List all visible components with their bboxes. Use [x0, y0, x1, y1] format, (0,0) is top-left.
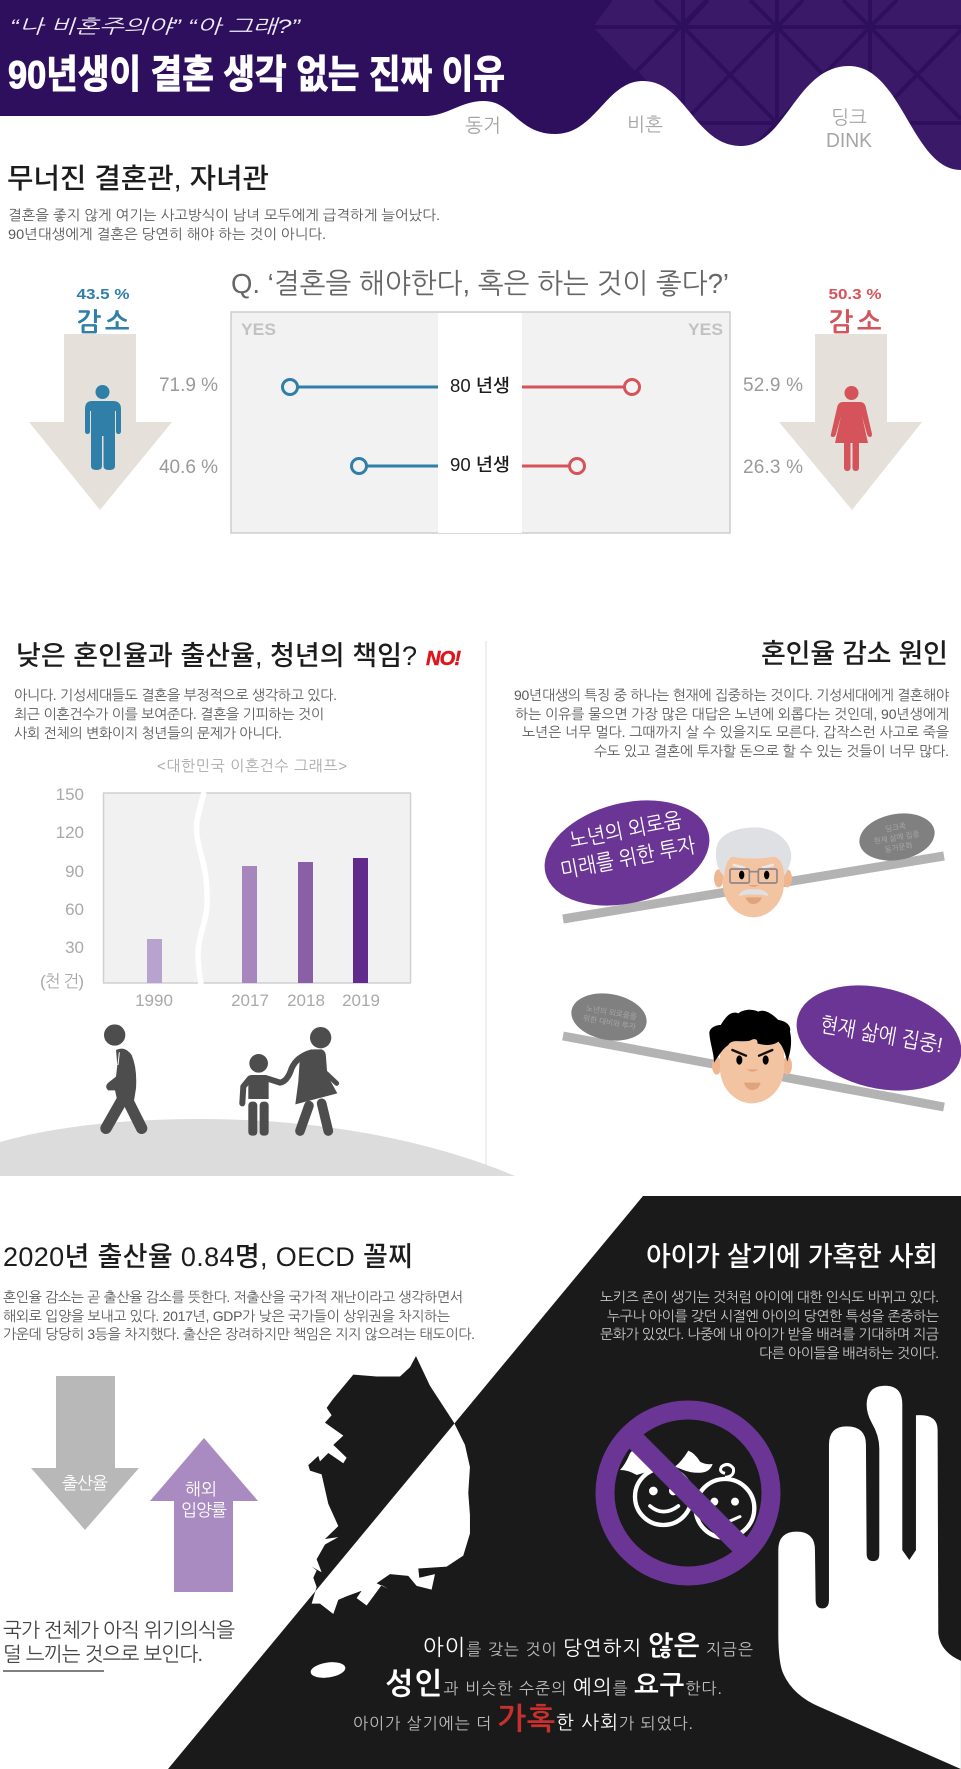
- small bubble: [568, 988, 650, 1046]
- bar chart: divorces: 1990: [135, 991, 173, 1010]
- statement: 국가 전체가 아직 위기의식을: [3, 1620, 235, 1642]
- dumbbell chart: marriage attitude: [231, 312, 730, 533]
- handwritten quote: “나 비혼주의야” “아 그래?”: [10, 17, 302, 38]
- heading: youth responsibility: 낮은 혼인율과 출산율, 청년의 책임?: [16, 641, 417, 671]
- arrow: birth rate down: [31, 1376, 139, 1530]
- big bubble: 노년의 외로움: [568, 809, 684, 853]
- female decrease stat: 50.3 %: [828, 286, 882, 303]
- closing message: 성인과 비슷한 수준의 예의를 요구한다.: [385, 1668, 722, 1701]
- icon: young man face: [709, 1010, 792, 1103]
- small bubble: [856, 808, 938, 866]
- heading: birth rate: 2020년 출산율 0.84명, OECD 꼴찌: [3, 1242, 413, 1272]
- bar chart: divorces: 2017: [231, 991, 269, 1010]
- arrow with woman icon: [779, 334, 922, 510]
- wave labels: DINK: [826, 130, 873, 152]
- wave labels: 비혼: [627, 115, 663, 136]
- section text: 아니다. 기성세대들도 결혼을 부정적으로 생각하고 있다.: [14, 687, 337, 703]
- seesaw: younger generation: [563, 969, 961, 1107]
- icon: older man face: [714, 827, 792, 917]
- bar chart: divorces: 2018: [287, 991, 325, 1010]
- arrow: birth rate down: 출산율: [62, 1474, 108, 1493]
- children faces: [620, 1451, 754, 1538]
- section text: [8, 207, 440, 242]
- male decrease stat: 감 소: [76, 307, 130, 337]
- small bubble: 위한 대비와 투자: [582, 1013, 637, 1032]
- bar chart: divorces: 150: [56, 785, 84, 804]
- arrow: overseas adoption up: 입양률: [181, 1501, 227, 1520]
- section text: 가운데 당당히 3등을 차지했다. 출산은 장려하지만 책임은 지지 않으려는 태도이다.: [3, 1326, 475, 1342]
- icon: stop hand: [778, 1386, 961, 1769]
- header banner: [0, 0, 961, 180]
- bar chart: divorces: 60: [65, 900, 84, 919]
- male decrease stat: 43.5 %: [76, 286, 130, 303]
- dumbbell chart: marriage attitude: 90 년생: [450, 455, 510, 475]
- section text: 사회 전체의 변화이지 청년들의 문제가 아니다.: [14, 725, 282, 741]
- map of Korea, white part: [312, 1424, 470, 1614]
- bar chart: divorces: (천 건): [40, 972, 84, 991]
- section text: 90년대생에게 결혼은 당연히 해야 하는 것이 아니다.: [8, 226, 326, 242]
- divider: [485, 641, 487, 1176]
- dark panel: [168, 1196, 961, 1769]
- percent labels: [159, 375, 803, 478]
- ground hill: [0, 1119, 515, 1176]
- bar chart: divorces: 2019: [342, 991, 380, 1010]
- NO! callout: NO!: [426, 648, 461, 670]
- male decrease stat: [76, 286, 130, 337]
- small bubble: 현재 삶에 집중: [873, 829, 920, 846]
- section text: 하는 이유를 물으면 가장 많은 대답은 노년에 외롭다는 것인데, 90년생에게: [515, 706, 949, 722]
- female decrease stat: 감 소: [828, 307, 882, 337]
- section text: 결혼을 좋지 않게 여기는 사고방식이 남녀 모두에게 급격하게 늘어났다.: [8, 207, 440, 223]
- section text: 문화가 있었다. 나중에 내 아이가 받을 배려를 기대하며 지금: [600, 1326, 939, 1342]
- seesaw: older generation: [533, 784, 944, 922]
- section text: 최근 이혼건수가 이를 보여준다. 결혼을 기피하는 것이: [14, 706, 324, 722]
- section text: 혼인율 감소는 곧 출산율 감소를 뜻한다. 저출산을 국가적 재난이라고 생각하면서: [3, 1289, 463, 1305]
- percent labels: 40.6 %: [159, 457, 218, 478]
- arrow with man icon: [29, 334, 172, 510]
- bar chart: divorces: 30: [65, 938, 84, 957]
- wave labels: [465, 108, 873, 152]
- statement: 덜 느끼는 것으로 보인다.: [3, 1644, 203, 1666]
- closing message: 아이를 갖는 것이 당연하지 않은 지금은: [423, 1631, 753, 1661]
- chart title: <대한민국 이혼건수 그래프>: [157, 758, 347, 775]
- percent labels: 71.9 %: [159, 375, 218, 396]
- section text: [14, 687, 337, 741]
- statement: [3, 1620, 235, 1671]
- big bubble: 현재 삶에 집중!: [818, 1013, 944, 1057]
- section text: 수도 있고 결혼에 투자할 돈으로 할 수 있는 것들이 너무 많다.: [594, 743, 949, 759]
- bar chart: divorces: 90: [65, 862, 84, 881]
- percent labels: 52.9 %: [743, 375, 803, 396]
- title: 90년생이 결혼 생각 없는 진짜 이유: [8, 54, 505, 97]
- section text: [600, 1289, 939, 1361]
- big bubble: 미래를 위한 투자: [559, 834, 698, 883]
- heading: marriage decline cause: 혼인율 감소 원인: [761, 639, 948, 669]
- section text: 다른 아이들을 배려하는 것이다.: [759, 1345, 939, 1361]
- heading: harsh society: 아이가 살기에 가혹한 사회: [646, 1242, 938, 1272]
- section text: 90년대생의 특징 중 하나는 현재에 집중하는 것이다. 기성세대에게 결혼해야: [514, 687, 950, 703]
- arrow: overseas adoption up: [150, 1438, 258, 1592]
- wave labels: 딩크: [831, 108, 867, 129]
- section text: 해외로 입양을 보내고 있다. 2017년, GDP가 낮은 국가들이 상위권을 차지하는: [3, 1308, 450, 1324]
- map of Korea, black part: [308, 1356, 470, 1614]
- bar chart: divorces: [40, 785, 410, 1010]
- section text: 노키즈 존이 생기는 것처럼 아이에 대한 인식도 바뀌고 있다.: [600, 1289, 939, 1305]
- closing message: 아이가 살기에는 더 가혹한 사회가 되었다.: [353, 1703, 693, 1736]
- icon: person walking alone: [104, 1024, 142, 1128]
- dumbbell chart: marriage attitude: YES: [241, 320, 276, 339]
- big bubble: [533, 784, 721, 922]
- small bubble: 노년의 외로움을: [585, 1004, 638, 1021]
- female decrease stat: [828, 286, 882, 337]
- Jeju island: [310, 1660, 346, 1680]
- wave labels: 동거: [465, 116, 501, 137]
- section text: [3, 1289, 475, 1342]
- closing message: [353, 1631, 753, 1736]
- survey question: Q. ‘결혼을 해야한다, 혹은 하는 것이 좋다?’: [231, 268, 729, 299]
- icon: parent with child: [242, 1027, 337, 1136]
- section text: [514, 687, 950, 759]
- percent labels: 26.3 %: [743, 457, 803, 478]
- section heading: marriage values: 무너진 결혼관, 자녀관: [7, 163, 269, 194]
- icon: no kids sign: [605, 1410, 771, 1576]
- bar chart: divorces: 120: [56, 823, 84, 842]
- big bubble: [785, 969, 961, 1107]
- small bubble: 딩크족: [884, 821, 907, 834]
- section text: 노년은 너무 멀다. 그때까지 살 수 있을지도 모른다. 갑작스런 사고로 죽을: [522, 724, 949, 740]
- small bubble: 동거문화: [884, 841, 913, 854]
- dumbbell chart: marriage attitude: YES: [688, 320, 723, 339]
- section text: 누구나 아이를 갖던 시절엔 아이의 당연한 특성을 존중하는: [607, 1308, 939, 1324]
- dumbbell chart: marriage attitude: 80 년생: [450, 376, 510, 396]
- arrow: overseas adoption up: 해외: [185, 1480, 217, 1499]
